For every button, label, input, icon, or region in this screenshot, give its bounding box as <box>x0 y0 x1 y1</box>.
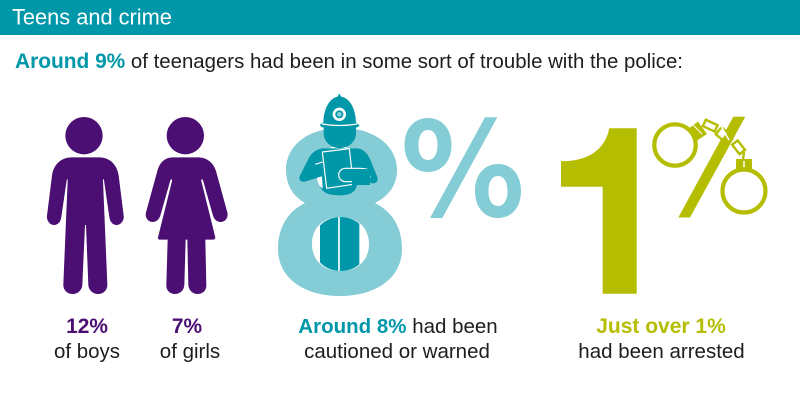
header bar <box>0 0 800 35</box>
large 1 percent graphic <box>561 117 766 294</box>
figure 1 <box>561 128 637 294</box>
hand <box>339 168 370 182</box>
right cuff lock <box>736 159 752 170</box>
face <box>324 126 356 148</box>
figure 8 <box>278 128 402 296</box>
icon: boy figure <box>47 117 124 294</box>
percent sign <box>404 117 521 218</box>
one percent stat: Just over 1% <box>596 315 726 338</box>
right cuff <box>722 170 766 212</box>
helmet <box>320 93 360 127</box>
icon: handcuffs <box>654 120 766 212</box>
icon: girl figure <box>146 117 228 294</box>
chain links <box>703 120 745 154</box>
title: Teens and crime <box>12 4 172 30</box>
eight percent stat second line: cautioned or warned <box>304 340 490 363</box>
white gap beside torso <box>317 176 323 188</box>
clipboard <box>322 149 353 188</box>
boys stat: 12% <box>66 315 108 338</box>
boys stat <box>54 315 120 363</box>
figure 8 upper counter <box>317 146 361 192</box>
torso and arms <box>299 148 378 195</box>
boys stat: of boys <box>54 340 120 363</box>
girls stat <box>160 315 220 363</box>
large 8 percent graphic <box>278 93 521 296</box>
girls stat: 7% <box>172 315 203 338</box>
girls stat: of girls <box>160 340 220 363</box>
left cuff lock <box>690 122 707 140</box>
percent slash <box>678 117 745 218</box>
icon: police officer <box>299 93 378 273</box>
one percent stat <box>578 315 745 363</box>
helmet badge <box>333 108 346 121</box>
legs <box>320 215 359 273</box>
intro sentence: Around 9% of teenagers had been in some sort of trouble with the police: <box>15 50 683 73</box>
one percent stat: had been arrested <box>578 340 745 363</box>
eight percent stat: Around 8% had been <box>298 315 498 338</box>
left cuff <box>654 124 696 166</box>
